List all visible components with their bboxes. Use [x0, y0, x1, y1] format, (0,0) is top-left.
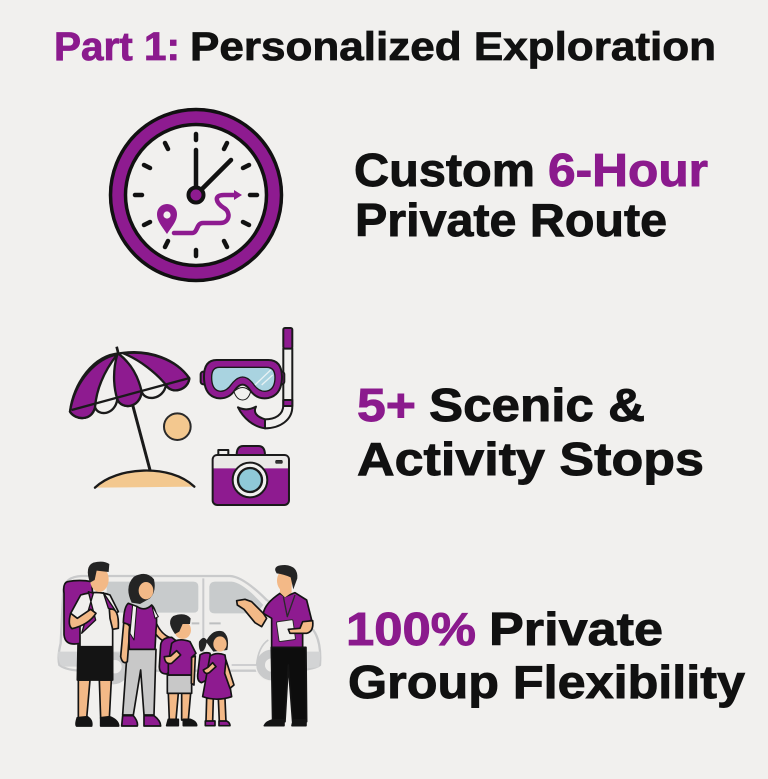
- clock hands: [196, 150, 231, 195]
- camera: [213, 446, 289, 505]
- text: scenic stops: 5+: [357, 379, 416, 431]
- text: scenic stops: Scenic &: [429, 379, 645, 431]
- tour guide: [237, 565, 313, 726]
- text: private group: Private: [489, 603, 663, 655]
- route line: [174, 195, 237, 233]
- route arrowhead: [234, 190, 242, 200]
- mother: [121, 574, 169, 726]
- umbrella: [70, 347, 189, 470]
- father: [64, 562, 119, 726]
- text: custom route: Private Route: [355, 194, 667, 246]
- text: custom route: Custom: [354, 144, 535, 196]
- illustration: family, guide and van: [58, 562, 320, 726]
- snorkel: [238, 328, 292, 428]
- title: Part 1:: [54, 25, 180, 69]
- text: private group: Group Flexibility: [348, 656, 745, 708]
- text: scenic stops: Activity Stops: [357, 433, 704, 485]
- title: Personalized Exploration: [190, 25, 716, 69]
- sand: [95, 470, 194, 488]
- text: custom route: 6-Hour: [548, 144, 708, 196]
- van: [58, 576, 320, 684]
- diving mask: [201, 360, 284, 400]
- map pin: [157, 204, 177, 234]
- boy: [159, 614, 197, 726]
- girl: [198, 631, 234, 726]
- icon: clock with route: [110, 110, 282, 280]
- text: custom route: [354, 144, 708, 246]
- icon: beach, snorkel and camera: [70, 328, 292, 505]
- text: private group: 100%: [346, 603, 476, 655]
- clock centre: [188, 188, 204, 202]
- text: scenic stops: [357, 379, 704, 485]
- sun: [164, 413, 191, 440]
- text: private group: [346, 603, 745, 708]
